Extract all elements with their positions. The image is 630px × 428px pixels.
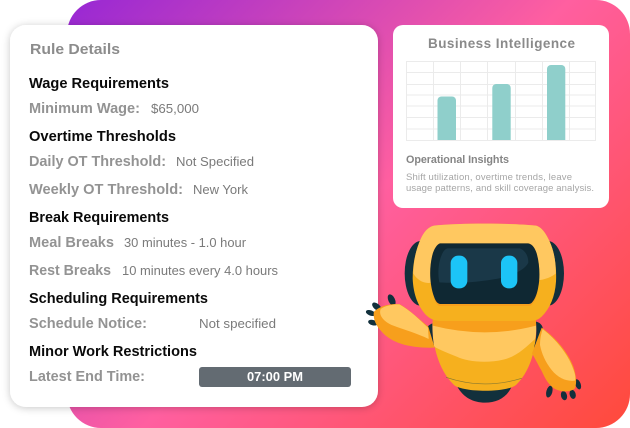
description text: usage patterns, and skill coverage analysis.: [406, 183, 594, 194]
section: wage requirements: $65,000: [151, 101, 199, 116]
heading: business intelligence: Business Intelligence: [428, 36, 575, 51]
section: overtime thresholds: Daily OT Threshold:: [29, 153, 166, 170]
section: break requirements: Rest Breaks: [29, 262, 111, 279]
icon: robot body: [426, 320, 543, 403]
time pill: 07:00 PM: 07:00 PM: [247, 370, 303, 384]
icon: robot raised arm: [365, 293, 435, 348]
description text: Shift utilization, overtime trends, leave: [406, 172, 572, 183]
section: scheduling requirements: Schedule Notice:: [29, 315, 147, 332]
section: wage requirements: Minimum Wage:: [29, 100, 140, 117]
robot illustration: [365, 224, 582, 403]
icon: robot ears: [405, 241, 564, 306]
time pill: 07:00 PM: [199, 367, 351, 387]
robot eyes: [451, 256, 517, 288]
heading: rule details: Rule Details: [30, 41, 120, 58]
section: scheduling requirements: [29, 290, 276, 332]
robot visor: [430, 243, 539, 304]
section: overtime thresholds: New York: [193, 182, 249, 197]
section: break requirements: Meal Breaks: [29, 234, 114, 251]
panel: business intelligence: [393, 25, 609, 208]
section: scheduling requirements: Scheduling Requirements: [29, 290, 208, 307]
section: wage requirements: Wage Requirements: [29, 75, 169, 92]
section: minor work restrictions: Latest End Time:: [29, 368, 145, 385]
section: break requirements: Break Requirements: [29, 209, 169, 226]
section: overtime thresholds: [29, 128, 254, 198]
section: minor work restrictions: [29, 343, 197, 385]
description text: [406, 172, 594, 194]
section: break requirements: [29, 209, 278, 279]
bar chart: [406, 61, 596, 141]
panel: rule details: [10, 25, 378, 407]
icon: robot lowered arm: [532, 328, 582, 401]
section: scheduling requirements: Not specified: [199, 316, 276, 331]
section: break requirements: 10 minutes every 4.0 hours: [122, 263, 278, 278]
section: overtime thresholds: Overtime Thresholds: [29, 128, 176, 145]
subheading: operational insights: Operational Insights: [406, 154, 509, 166]
section: overtime thresholds: Not Specified: [176, 154, 254, 169]
section: wage requirements: [29, 75, 199, 117]
section: minor work restrictions: Minor Work Restrictions: [29, 343, 197, 360]
section: break requirements: 30 minutes - 1.0 hour: [124, 235, 247, 250]
section: overtime thresholds: Weekly OT Threshold:: [29, 181, 183, 198]
icon: robot head: [413, 224, 556, 321]
